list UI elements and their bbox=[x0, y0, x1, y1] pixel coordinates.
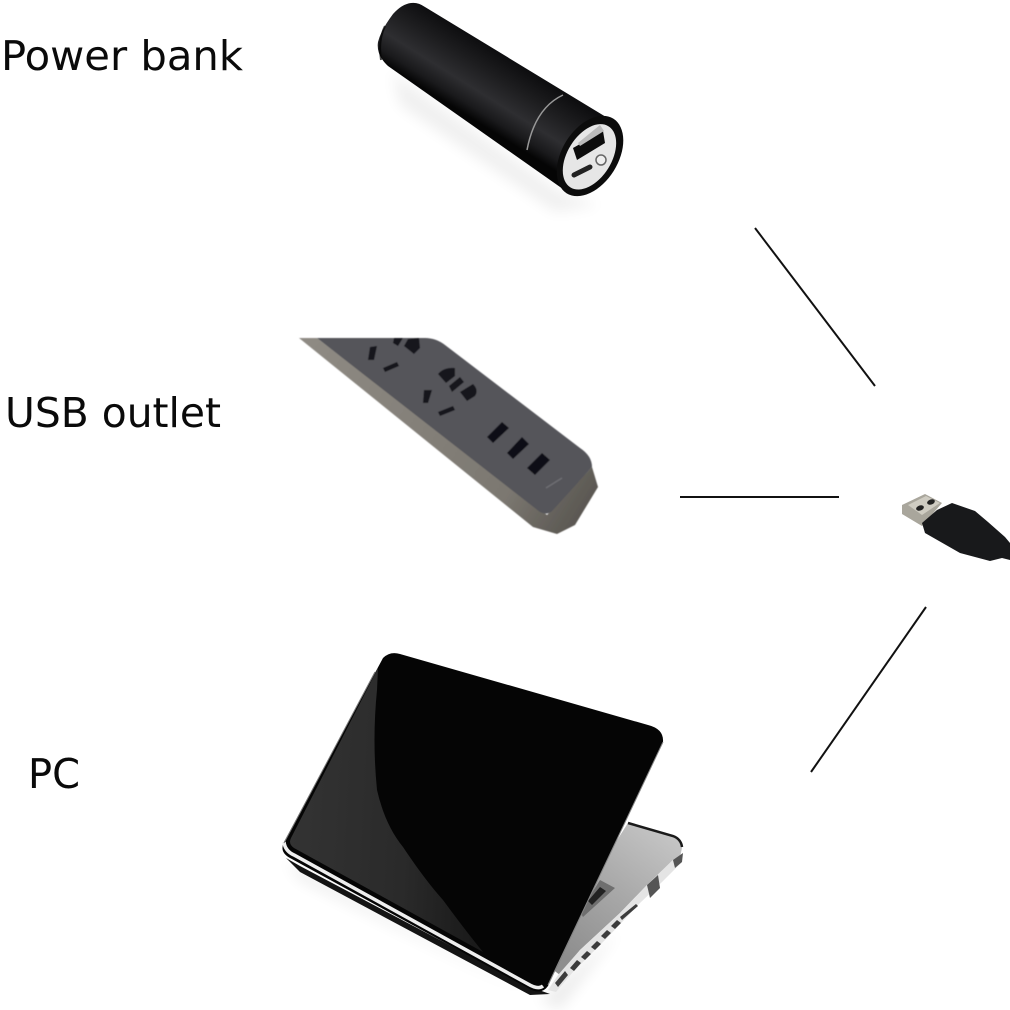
label: USB outlet: USB outlet bbox=[5, 389, 221, 437]
shadow bbox=[392, 72, 600, 212]
front edge band bbox=[548, 858, 682, 992]
USB port bbox=[573, 131, 605, 160]
connector line: power bank to plug bbox=[755, 228, 875, 386]
side clip bbox=[647, 875, 660, 898]
black boot and cable bbox=[922, 503, 1010, 561]
icon: laptop bbox=[282, 653, 683, 1010]
micro port bbox=[574, 167, 590, 175]
strip top bbox=[317, 338, 592, 514]
laptop base surface bbox=[540, 823, 682, 975]
metal connector bbox=[902, 494, 942, 526]
seam ring bbox=[527, 95, 563, 150]
cylinder body bbox=[378, 3, 606, 194]
strip side bbox=[299, 338, 598, 534]
lid underside black band bbox=[286, 858, 550, 995]
connector line: outlet to plug bbox=[680, 496, 839, 498]
label: PC: PC bbox=[28, 750, 80, 798]
icon: USB power strip bbox=[299, 338, 598, 534]
keyboard glimpse bbox=[580, 880, 615, 917]
lid reflection bbox=[290, 668, 483, 952]
USB ports bbox=[487, 422, 550, 475]
white edge highlight bbox=[284, 842, 543, 988]
button bbox=[596, 155, 606, 165]
icon: USB plug bbox=[902, 494, 1010, 561]
end face bbox=[543, 104, 637, 208]
label: Power bank: Power bank bbox=[1, 32, 243, 80]
lid bbox=[282, 653, 663, 992]
shadow bbox=[285, 860, 620, 1010]
icon: power bank bbox=[378, 3, 637, 212]
socket holes bbox=[368, 338, 477, 416]
connector line: PC to plug bbox=[811, 607, 926, 772]
port strip bbox=[555, 904, 638, 987]
